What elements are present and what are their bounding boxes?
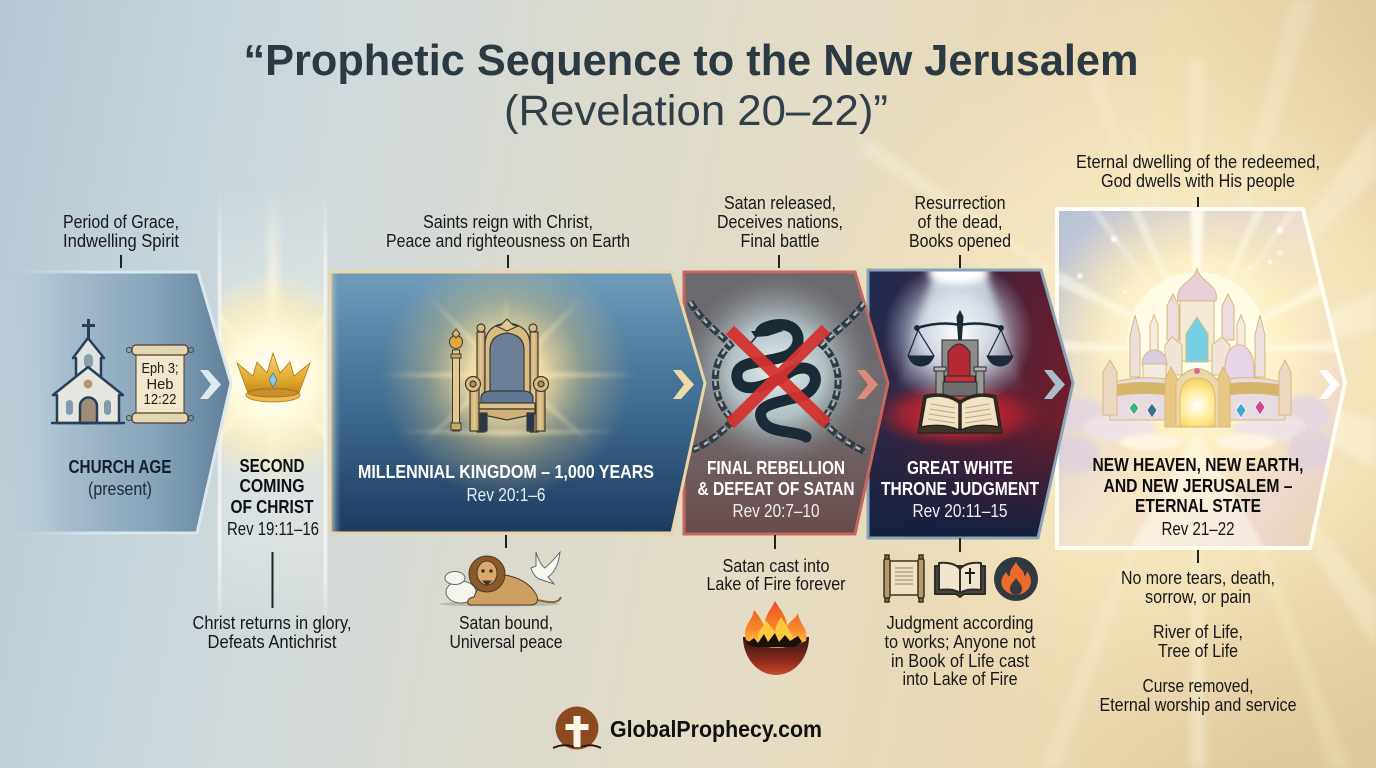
callout: eternal state list [1100,550,1296,715]
logo: GlobalProphecy.com [553,706,822,750]
icon: sceptre [450,329,462,431]
callout: final rebellion top text: Satan released, [724,193,836,213]
callout: great white top text: of the dead, [918,212,1002,232]
icon: fire bowl [743,601,809,675]
label: final rebellion: & DEFEAT OF SATAN [698,479,854,499]
arrow: final rebellion [857,370,878,399]
label: millennial kingdom [358,462,654,505]
icon: book of life [935,563,985,597]
label: new jerusalem: NEW HEAVEN, NEW EARTH, [1092,455,1304,475]
panel: church age [0,272,231,533]
label: great white throne: THRONE JUDGMENT [881,479,1039,499]
callout: eternal state list: Eternal worship and service [1100,695,1296,715]
callout: lake of fire: Lake of Fire forever [706,574,846,594]
callout: millennial top text: Saints reign with Christ, [423,212,593,232]
label: new jerusalem: AND NEW JERUSALEM – [1104,476,1292,496]
callout: final rebellion top text: Final battle [740,231,820,251]
arrow: church age [200,370,221,399]
callout: eternal state list: River of Life, [1153,622,1243,642]
callout: church age top text: Period of Grace, [63,212,179,232]
logo: GlobalProphecy.com: GlobalProphecy.com [610,716,822,742]
label: great white throne [881,458,1039,521]
label: church age: (present) [88,479,152,499]
label: second coming [227,456,319,539]
label: final rebellion: Rev 20:7–10 [732,501,820,521]
callout: eternal dwelling [1076,152,1320,207]
callout: eternal state list: Tree of Life [1158,641,1238,661]
callout: lake of fire: Satan cast into [722,556,830,576]
callout: great white top text: Resurrection [914,193,1006,213]
icon: scales [908,311,1013,366]
label: second coming: COMING [240,476,304,496]
label: final rebellion [698,458,854,521]
callout: millennial top text: Peace and righteousness on Earth [386,231,630,251]
label: second coming: Rev 19:11–16 [227,519,319,539]
icon: crown [237,353,310,402]
icon: scroll: Heb [146,376,174,393]
icon: cross and book [553,706,601,750]
icon: throne [466,319,548,432]
icon: red cross [730,329,827,424]
callout: judgment text: into Lake of Fire [902,669,1018,689]
icon: judgment scroll [884,555,924,602]
icon: church [51,319,125,423]
callout: eternal dwelling: God dwells with His people [1101,171,1295,191]
callout: final rebellion top text: Deceives nations, [717,212,843,232]
callout: church age top text: Indwelling Spirit [63,231,179,251]
label: second coming: SECOND [240,456,304,476]
icon: serpent [737,321,815,437]
title [244,36,1138,135]
callout: satan bound [440,535,562,652]
panel: millennial kingdom [330,250,705,533]
callout: final rebellion top text [717,193,843,268]
label: final rebellion: FINAL REBELLION [707,458,845,478]
callout: christ returns [192,552,352,652]
callout: millennial top text [386,212,630,268]
label: second coming: OF CHRIST [230,497,314,517]
callout: great white top text [909,193,1011,268]
icon: scroll [126,345,194,423]
callout: eternal state list: Curse removed, [1142,676,1254,696]
arrow: millennial [673,370,694,399]
icon: fire circle [994,557,1038,601]
label: new jerusalem [1092,455,1304,539]
panel: new jerusalem [1055,207,1347,550]
label: great white throne: Rev 20:11–15 [912,501,1008,521]
callout: eternal dwelling: Eternal dwelling of the redeemed, [1076,152,1320,172]
icon: city [1103,268,1291,427]
label: church age [68,457,172,499]
callout: satan bound: Satan bound, [459,613,553,633]
callout: lake of fire [706,535,846,675]
icon: scroll: Eph 3; [142,360,178,377]
panel: final rebellion [682,272,888,534]
icon: chains [690,302,866,452]
title: (Revelation 20–22)” [504,87,888,135]
icon: scroll: 12:22 [144,391,176,408]
panel: great white throne [868,260,1073,538]
arrow: new jerusalem [1319,370,1340,399]
title: “Prophetic Sequence to the New Jerusalem [244,36,1138,85]
callout: judgment text: to works; Anyone not [884,632,1036,652]
icon: throne [934,340,986,396]
label: church age: CHURCH AGE [68,457,172,477]
label: millennial kingdom: MILLENNIAL KINGDOM – 1,000 YEARS [358,462,654,482]
callout: christ returns: Christ returns in glory, [192,613,352,633]
callout: satan bound: Universal peace [450,632,562,652]
icon: clouds [1051,395,1332,473]
label: new jerusalem: Rev 21–22 [1162,519,1234,539]
callout: church age top text [63,212,179,268]
arrow: great white throne [1044,370,1065,399]
label: new jerusalem: ETERNAL STATE [1135,496,1261,516]
label: great white throne: GREAT WHITE [907,458,1013,478]
callout: eternal state list: sorrow, or pain [1145,587,1251,607]
callout: great white top text: Books opened [909,231,1011,251]
callout: judgment text: Judgment according [886,613,1034,633]
callout: christ returns: Defeats Antichrist [208,632,336,652]
label: millennial kingdom: Rev 20:1–6 [466,485,546,505]
icon: gems [1129,400,1265,418]
callout: judgment text [884,538,1038,689]
panel: second coming [217,208,328,613]
callout: judgment text: in Book of Life cast [891,651,1029,671]
icon: open book [918,394,1002,433]
icon: lion, lamb and dove [440,552,561,606]
callout: eternal state list: No more tears, death, [1121,568,1275,588]
